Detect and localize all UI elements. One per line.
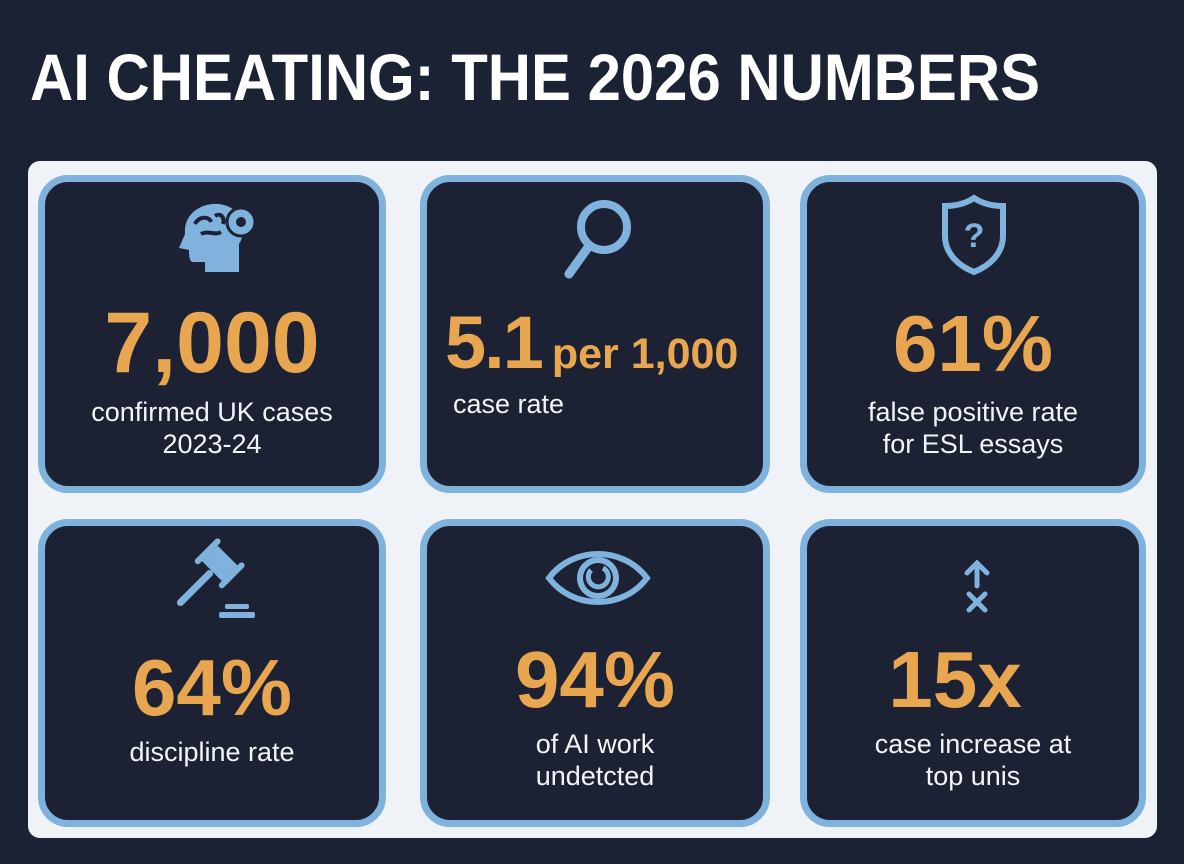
icon: eye: [545, 551, 651, 605]
card: 5.1 per 1,000: [420, 175, 770, 493]
icon: shield question: [942, 194, 1006, 276]
stat label: [91, 397, 333, 459]
stat number: 7,000: [104, 295, 320, 391]
card: 94%: [420, 519, 770, 827]
stat label: confirmed UK cases: [91, 397, 333, 427]
stat number: 15x: [888, 635, 1022, 724]
icon: magnifier: [564, 200, 631, 278]
stat label: [536, 729, 654, 791]
stat label: for ESL essays: [883, 429, 1063, 459]
stat label: 2023-24: [162, 429, 262, 459]
icon: shield question: ?: [964, 217, 984, 255]
stat label: case increase at: [875, 729, 1071, 759]
card: 61%: [800, 175, 1146, 493]
title: AI CHEATING: THE 2026 NUMBERS: [30, 40, 1040, 114]
stat number: 5.1per 1,000: [445, 301, 738, 384]
icon: brain head with gear: [179, 204, 254, 272]
card: 64%: [38, 519, 386, 827]
stat label: discipline rate: [129, 737, 295, 767]
stat label: top unis: [926, 761, 1020, 791]
stat number: 61%: [893, 299, 1053, 388]
stat label: [875, 729, 1072, 791]
card: 7,000: [38, 175, 386, 493]
stat label: case rate: [453, 389, 564, 419]
icon: arrow up and x: [964, 560, 990, 612]
stat label: of AI work: [536, 729, 654, 759]
stat label: false positive rate: [868, 397, 1078, 427]
stat label: undetcted: [536, 761, 654, 791]
stat label: [868, 397, 1078, 459]
icon: gavel: [177, 538, 255, 618]
panel: stats: [28, 161, 1157, 838]
card: 15x: [800, 519, 1146, 827]
stat number: 64%: [132, 643, 292, 732]
stat number: 94%: [515, 635, 675, 724]
